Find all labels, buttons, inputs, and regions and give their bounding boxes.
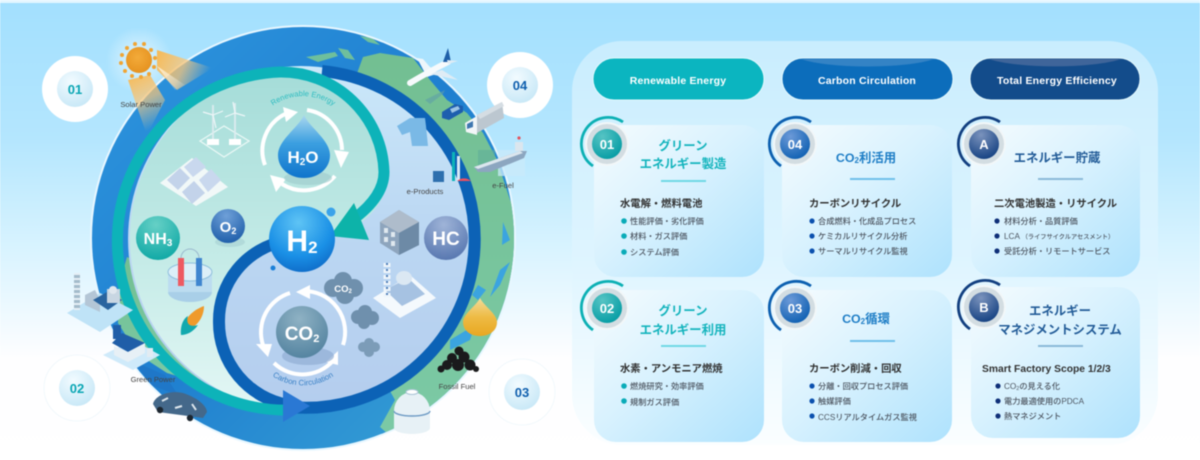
card title: 循環 (865, 311, 891, 326)
card 01 (581, 117, 764, 277)
label: solar power: Solar Power (120, 100, 162, 109)
NH3 bubble: 3 (167, 238, 173, 249)
H2 sphere: H (286, 225, 308, 258)
card body (994, 197, 1117, 256)
blue arrow head (283, 390, 310, 422)
label: fossil fuel: Fossil Fuel (439, 382, 476, 391)
badge 03 (769, 281, 817, 330)
card body: 合成燃料・化成品プロセス (818, 216, 916, 226)
icon: CO2 cloud (324, 272, 363, 304)
card body (620, 362, 723, 407)
badge 04 (769, 117, 817, 166)
NH3 bubble (136, 216, 180, 260)
heading pill: renewable energy: Renewable Energy (630, 75, 726, 87)
white cycle arrows (261, 291, 345, 374)
badge A (958, 117, 1006, 166)
NH3 bubble: NH (144, 231, 167, 248)
badge 04: 04 (788, 137, 803, 152)
card title: グリーン (659, 138, 707, 153)
card title: エネルギー製造 (640, 156, 727, 171)
card title (640, 138, 727, 171)
icon: solar panels (160, 157, 228, 206)
icon: e-products bottles (433, 152, 471, 182)
card body: カーボンリサイクル (809, 198, 901, 210)
carbon circulation outer arc (290, 71, 475, 408)
card title (998, 304, 1122, 337)
card body: 性能評価・劣化評価 (630, 216, 704, 226)
heading pill: carbon circulation: Carbon Circulation (818, 75, 916, 87)
card body: 水電解・燃料電池 (620, 197, 703, 210)
label: e-fuel: e-Fuel (492, 181, 514, 190)
badge 01: 01 (68, 82, 82, 97)
CO2 cycle: CO (285, 324, 313, 345)
icon: ship (474, 136, 527, 176)
icon: refinery factory (373, 263, 436, 318)
H2O cycle (260, 90, 350, 193)
heading pill: total energy efficiency (970, 58, 1140, 100)
heading pill: total energy efficiency: Total Energy Efficiency (997, 75, 1117, 87)
card title: CO (836, 151, 854, 165)
icon: T-shirt (397, 118, 428, 146)
card body: 燃焼研究・効率評価 (630, 381, 704, 391)
carbon circulation curved label: Carbon Circulation (273, 372, 334, 386)
heading pill: renewable energy (593, 58, 764, 100)
icon: CO2 cloud: 2 (348, 289, 352, 295)
badge 02 (44, 355, 110, 421)
H2 sphere (269, 206, 336, 272)
card body (809, 198, 916, 256)
CO2 cycle: 2 (313, 333, 319, 345)
card body: 受託分析・リモートサービス (1004, 246, 1110, 256)
HC bubble: HC (432, 229, 460, 250)
sun rays and sun (106, 27, 213, 135)
card 04 (769, 117, 952, 277)
card title (640, 303, 726, 337)
HC bubble (424, 216, 468, 260)
badge 01: 01 (600, 137, 614, 152)
card body: の見える化 (1019, 381, 1060, 391)
card body: 2 (1016, 386, 1019, 392)
O2 bubble (211, 209, 245, 247)
white cycle arrows (262, 110, 342, 190)
badge 04 (487, 52, 553, 118)
panel: energy solutions (572, 41, 1158, 445)
central yin-yang disk (117, 66, 475, 422)
icon: green house (103, 325, 160, 370)
card title: 2 (854, 156, 859, 165)
heading pill: carbon circulation (782, 58, 953, 100)
card 02 (581, 281, 764, 442)
icon: smallest cloud (358, 338, 380, 357)
card title: CO (842, 312, 861, 326)
card body: 分離・回収プロセス評価 (818, 381, 908, 391)
card body: 水素・アンモニア燃焼 (620, 362, 723, 375)
card title: 2 (861, 317, 866, 326)
icon: electrolyser tank (168, 249, 212, 302)
badge 03 (489, 359, 555, 425)
renewable energy teal arc (117, 72, 384, 410)
card body: LCA （ライフサイクルアセスメント） (1004, 232, 1114, 241)
renewable energy region (130, 67, 388, 411)
badge 03: 03 (788, 301, 802, 316)
card title: エネルギー (1029, 304, 1091, 318)
card B (958, 280, 1140, 438)
card body (620, 197, 704, 257)
icon: storage dome (394, 390, 430, 434)
card title: エネルギー利用 (640, 322, 726, 337)
card body: CO (1004, 382, 1016, 391)
O2 bubble: 2 (231, 226, 236, 236)
icon: dark car (153, 392, 207, 421)
icon: airplane (410, 48, 458, 104)
icon: CO2 cloud: CO (334, 284, 348, 295)
card body: Smart Factory Scope 1/2/3 (982, 364, 1111, 375)
card body: ケミカルリサイクル分析 (818, 231, 907, 241)
badge A: A (979, 137, 989, 152)
card title: グリーン (659, 303, 707, 318)
card body: サーマルリサイクル監視 (818, 246, 908, 256)
H2O cycle: O (305, 148, 319, 167)
H2O cycle: 2 (300, 157, 306, 168)
icon: wind turbines (200, 102, 249, 157)
card title: エネルギー貯蔵 (1014, 150, 1101, 165)
card body: CCSリアルタイムガス監視 (818, 412, 917, 422)
icon: oil drop (463, 298, 497, 336)
card body: 材料分析・品質評価 (1004, 216, 1078, 226)
icon: feather fuel (181, 306, 204, 335)
label: e-products: e-Products (407, 187, 444, 196)
badge 04: 04 (513, 78, 528, 93)
card body (982, 364, 1111, 421)
carbon circulation inner arc (219, 241, 288, 405)
badge 02: 02 (600, 301, 614, 316)
badge B (958, 280, 1006, 329)
teal arrow head (330, 203, 369, 240)
icon: truck (465, 102, 504, 135)
CO2 sphere (282, 347, 334, 365)
card body: 二次電池製造・リサイクル (994, 197, 1117, 210)
water drop (284, 171, 332, 185)
card title: マネジメントシステム (998, 323, 1122, 337)
CO2 cycle (256, 284, 348, 386)
card body: 熱マネジメント (1004, 411, 1061, 421)
card title: 利活用 (859, 150, 896, 165)
card body: 電力最適使用のPDCA (1004, 396, 1085, 406)
O2 bubble: O (220, 219, 231, 236)
badge 01 (42, 56, 108, 122)
icon: blue car (442, 104, 463, 120)
globe ring (90, 25, 530, 451)
renewable energy curved label: Renewable Energy (270, 90, 336, 106)
card body (809, 362, 917, 422)
card body: カーボン削減・回収 (809, 362, 902, 375)
card body: 触媒評価 (818, 396, 851, 406)
icon: power plant (67, 273, 133, 332)
label: green power: Green Power (131, 375, 176, 384)
card body: 材料・ガス評価 (630, 231, 687, 241)
card A (958, 117, 1140, 277)
card 03 (769, 281, 952, 442)
badge 02 (581, 281, 629, 330)
icon: building (380, 210, 419, 255)
icon: small cloud (351, 305, 379, 329)
badge B: B (979, 300, 989, 315)
badge 01 (581, 117, 629, 166)
H2O cycle: H (287, 148, 300, 167)
card body: 規制ガス評価 (630, 397, 679, 407)
card body: システム評価 (630, 247, 679, 257)
icon: coal pile (438, 346, 479, 372)
badge 02: 02 (70, 381, 84, 396)
badge 03: 03 (515, 385, 529, 400)
H2 sphere: 2 (308, 238, 318, 257)
